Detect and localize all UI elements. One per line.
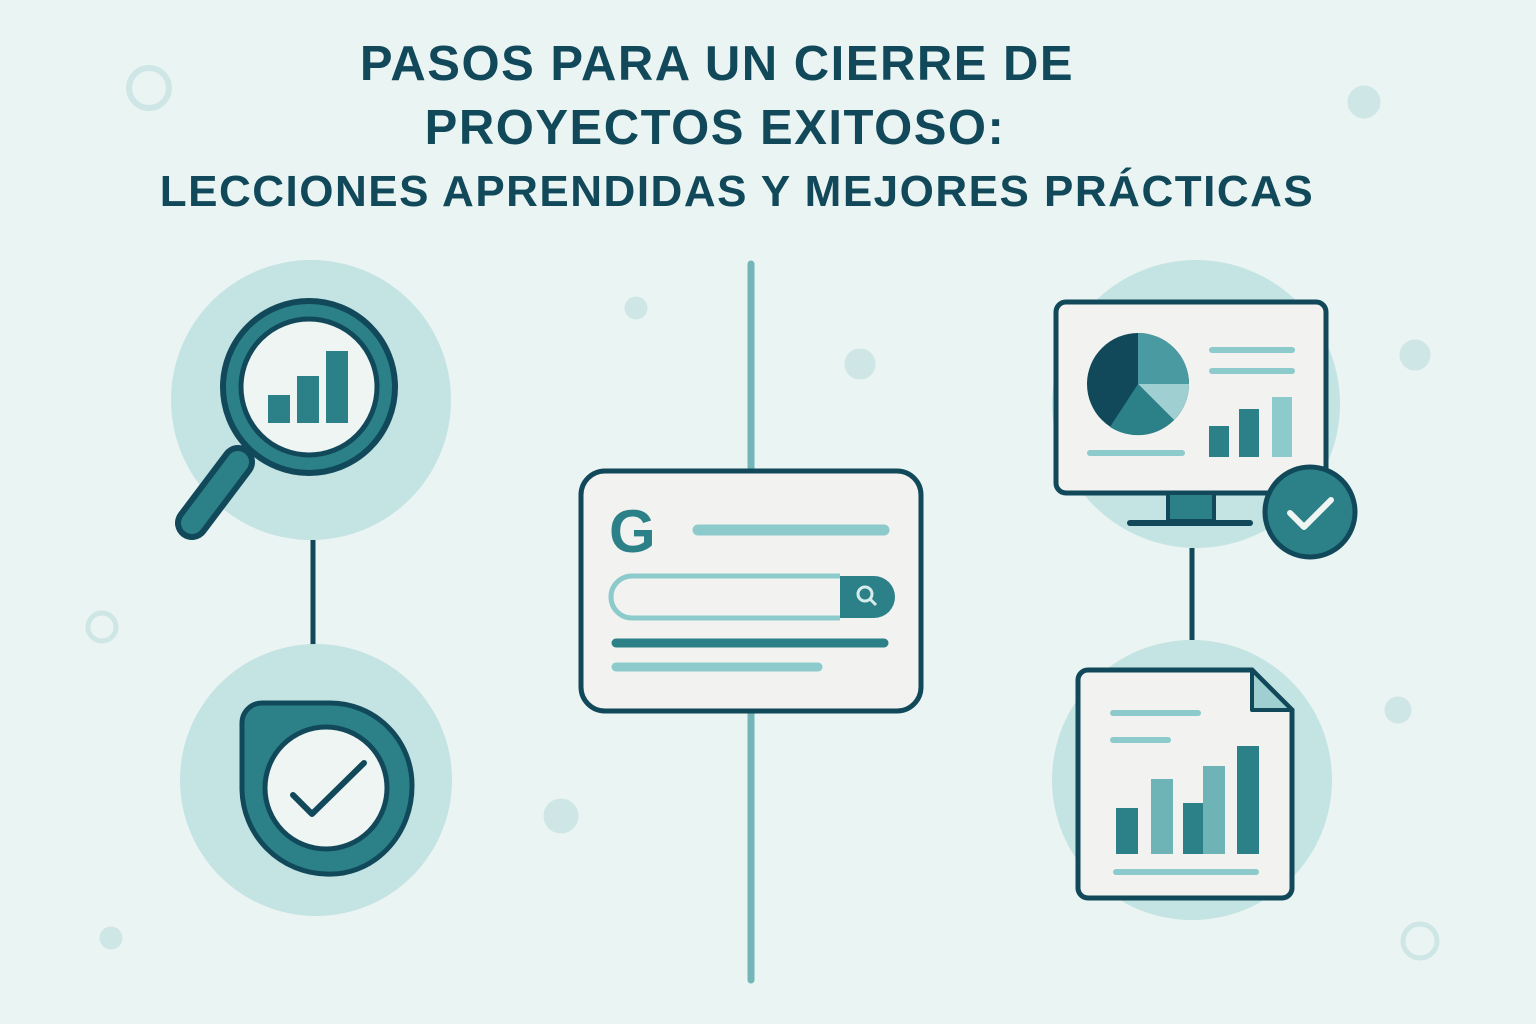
center vertical line	[748, 264, 754, 980]
decorative dots	[88, 68, 1437, 958]
right connector	[1190, 548, 1194, 640]
title: PASOS PARA UN CIERRE DE	[360, 37, 1074, 91]
title	[160, 37, 1314, 216]
card: search: G	[609, 498, 656, 565]
icon: shield check	[180, 644, 452, 916]
icon: magnifier with chart	[171, 260, 451, 540]
icon: report document	[1052, 640, 1332, 920]
title: LECCIONES APRENDIDAS Y MEJORES PRÁCTICAS	[160, 167, 1314, 216]
card: search	[581, 471, 921, 711]
left connector	[310, 540, 316, 645]
title: PROYECTOS EXITOSO:	[425, 101, 1005, 155]
icon: monitor dashboard	[1052, 260, 1355, 557]
